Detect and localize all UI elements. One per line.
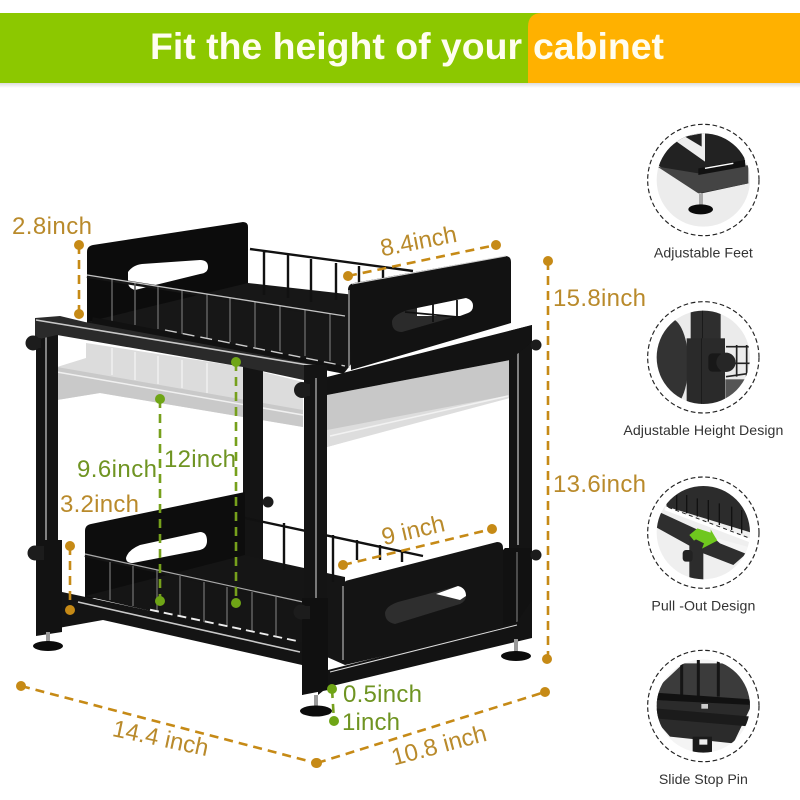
dimension: 14.4 inch: 14.4 inch xyxy=(110,715,211,762)
lower front-left beam xyxy=(36,590,302,665)
dimension: 9.6inch: 9.6inch xyxy=(77,456,157,483)
dimension: 10.8 inch: 10.8 inch xyxy=(389,720,490,771)
dimension: 12inch xyxy=(164,357,241,608)
dimension: 3.2inch xyxy=(60,491,139,615)
lower basket front rail xyxy=(85,555,303,603)
dimension: 14.4 inch xyxy=(16,681,321,768)
dimension: 12inch: 12inch xyxy=(164,446,236,473)
dimension: 9 inch xyxy=(338,510,497,570)
caption: Adjustable Height Design xyxy=(623,423,783,439)
lower right side frame xyxy=(318,600,532,695)
caption: Slide Stop Pin xyxy=(659,772,748,788)
rear legs xyxy=(36,320,532,632)
caption: Pull -Out Design xyxy=(651,599,755,615)
header banner: cabinet xyxy=(533,25,664,67)
front corner leg xyxy=(302,365,328,695)
dimension: 9.6inch xyxy=(77,394,165,606)
dimension: 8.4inch xyxy=(343,221,501,281)
upper right side beam xyxy=(327,325,532,395)
title: Fit the height of your xyxy=(150,25,522,67)
lower left sleeve xyxy=(36,540,62,636)
knobs xyxy=(26,336,542,620)
lower basket back panel xyxy=(85,492,245,600)
dimension: 2.8inch xyxy=(12,213,92,319)
dimension: 8.4inch: 8.4inch xyxy=(378,221,459,262)
detail: adjustable feet xyxy=(648,124,759,262)
upper basket rear rail xyxy=(250,249,413,302)
dimension: 9 inch: 9 inch xyxy=(379,510,448,551)
front sleeve on corner leg xyxy=(302,598,328,695)
dimension: 0.5inch and 1inch clearance xyxy=(327,681,422,736)
lower basket tray and rear rail xyxy=(85,555,345,665)
dimension: 0.5inch and 1inch clearance: 0.5inch xyxy=(343,681,422,708)
detail: adjustable height design xyxy=(623,302,783,439)
product: two-tier pull-out rack xyxy=(26,222,542,716)
detail: slide stop pin xyxy=(648,650,759,788)
lower front-right panel with handle slot xyxy=(343,542,503,665)
upper basket front rail xyxy=(87,276,345,317)
dimension: total height 15.8inch and 13.6inch: 15.8inch xyxy=(553,285,646,312)
upper basket back panel xyxy=(87,222,248,325)
dimension: 3.2inch: 3.2inch xyxy=(60,491,139,518)
detail: pull-out design with green arrow xyxy=(648,477,759,615)
caption: Adjustable Feet xyxy=(654,246,753,262)
dimension: total height 15.8inch and 13.6inch xyxy=(542,256,646,664)
reflection of pulled-out basket xyxy=(57,343,510,447)
header banner xyxy=(0,13,800,88)
dimension: 2.8inch: 2.8inch xyxy=(12,213,92,240)
upper front-right panel with handle slot xyxy=(348,256,511,370)
upper basket tray xyxy=(87,283,400,372)
feet xyxy=(33,632,531,716)
dimension: 0.5inch and 1inch clearance: 1inch xyxy=(342,709,400,736)
upper front-left beam xyxy=(35,316,327,385)
dimension: total height 15.8inch and 13.6inch: 13.6inch xyxy=(553,471,646,498)
dimension: 10.8 inch xyxy=(312,687,550,771)
